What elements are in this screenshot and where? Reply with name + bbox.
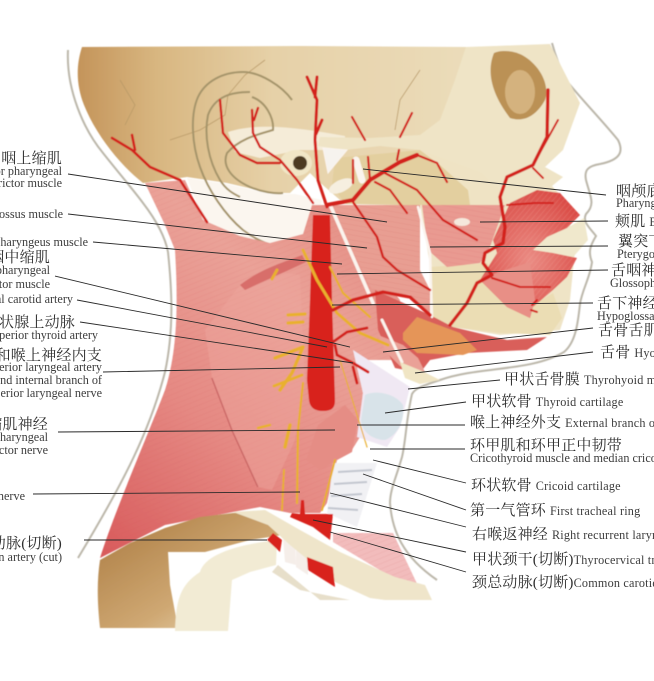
mandible <box>430 263 562 335</box>
orbit <box>491 51 546 119</box>
trachea <box>327 463 377 527</box>
white highlight on temporal bone <box>228 127 345 158</box>
leader lines <box>33 169 608 572</box>
labels: right column: 环状软骨 Cricoid cartilage <box>471 477 621 494</box>
maxilla <box>420 150 510 210</box>
submandibular gland <box>403 317 477 355</box>
white fascia under the skull <box>187 178 322 243</box>
scapula region <box>98 512 282 628</box>
lingual artery <box>333 292 430 315</box>
posterior auricular artery <box>220 100 280 163</box>
coracoid and acromion <box>175 540 277 631</box>
nerves <box>258 250 388 510</box>
labial branches <box>492 120 558 312</box>
infratemporal fossa <box>332 150 470 205</box>
teeth <box>533 218 588 256</box>
maxillary branches <box>352 113 477 240</box>
first rib <box>272 565 350 600</box>
orbit shadow <box>505 70 535 114</box>
ear outline <box>193 72 297 248</box>
hyoid bone <box>400 362 440 384</box>
styloid label patch <box>327 175 355 197</box>
orbicularis oris <box>480 190 580 318</box>
anatomical illustration <box>68 43 621 631</box>
suture line <box>120 60 420 140</box>
maxillary artery <box>327 155 417 205</box>
facial bones <box>318 44 580 335</box>
white tendons <box>323 148 432 362</box>
face constrictor muscles <box>330 205 505 315</box>
labels: right column: 第一气管环 First tracheal ring <box>470 502 640 519</box>
arteries <box>112 77 558 383</box>
external auditory meatus <box>280 150 312 176</box>
clavicle <box>233 510 432 600</box>
labels: left column: 咽上缩肌 <box>1 150 62 167</box>
neck muscles <box>100 180 405 558</box>
strap muscles <box>333 533 420 590</box>
superior thyroid artery <box>333 328 368 383</box>
skull <box>78 46 470 205</box>
sternocleidomastoid edge <box>212 378 258 487</box>
occipital artery <box>112 135 207 222</box>
carotid arteries <box>267 215 335 587</box>
superficial temporal artery <box>307 77 327 207</box>
facial artery <box>450 90 548 325</box>
skin outline <box>68 43 621 580</box>
auricular branch <box>252 108 313 203</box>
depressor muscle <box>482 262 535 318</box>
white fascia above clavicle <box>283 535 308 575</box>
ascending branch <box>353 202 430 290</box>
labels: right column: 环甲肌和环甲正中韧带 <box>470 437 622 454</box>
hyoglossus muscle <box>378 335 425 372</box>
posterior muscle shading <box>205 270 305 490</box>
labels: left column <box>0 150 103 564</box>
labels: right column: 甲状软骨 Thyroid cartilage <box>471 393 623 410</box>
hyoglossus and digastric <box>375 290 547 373</box>
thyropharyngeus fold <box>240 255 306 290</box>
inferior constrictor <box>306 405 358 470</box>
labels: right column <box>470 182 654 591</box>
thyroid cartilage and membrane <box>353 350 410 447</box>
